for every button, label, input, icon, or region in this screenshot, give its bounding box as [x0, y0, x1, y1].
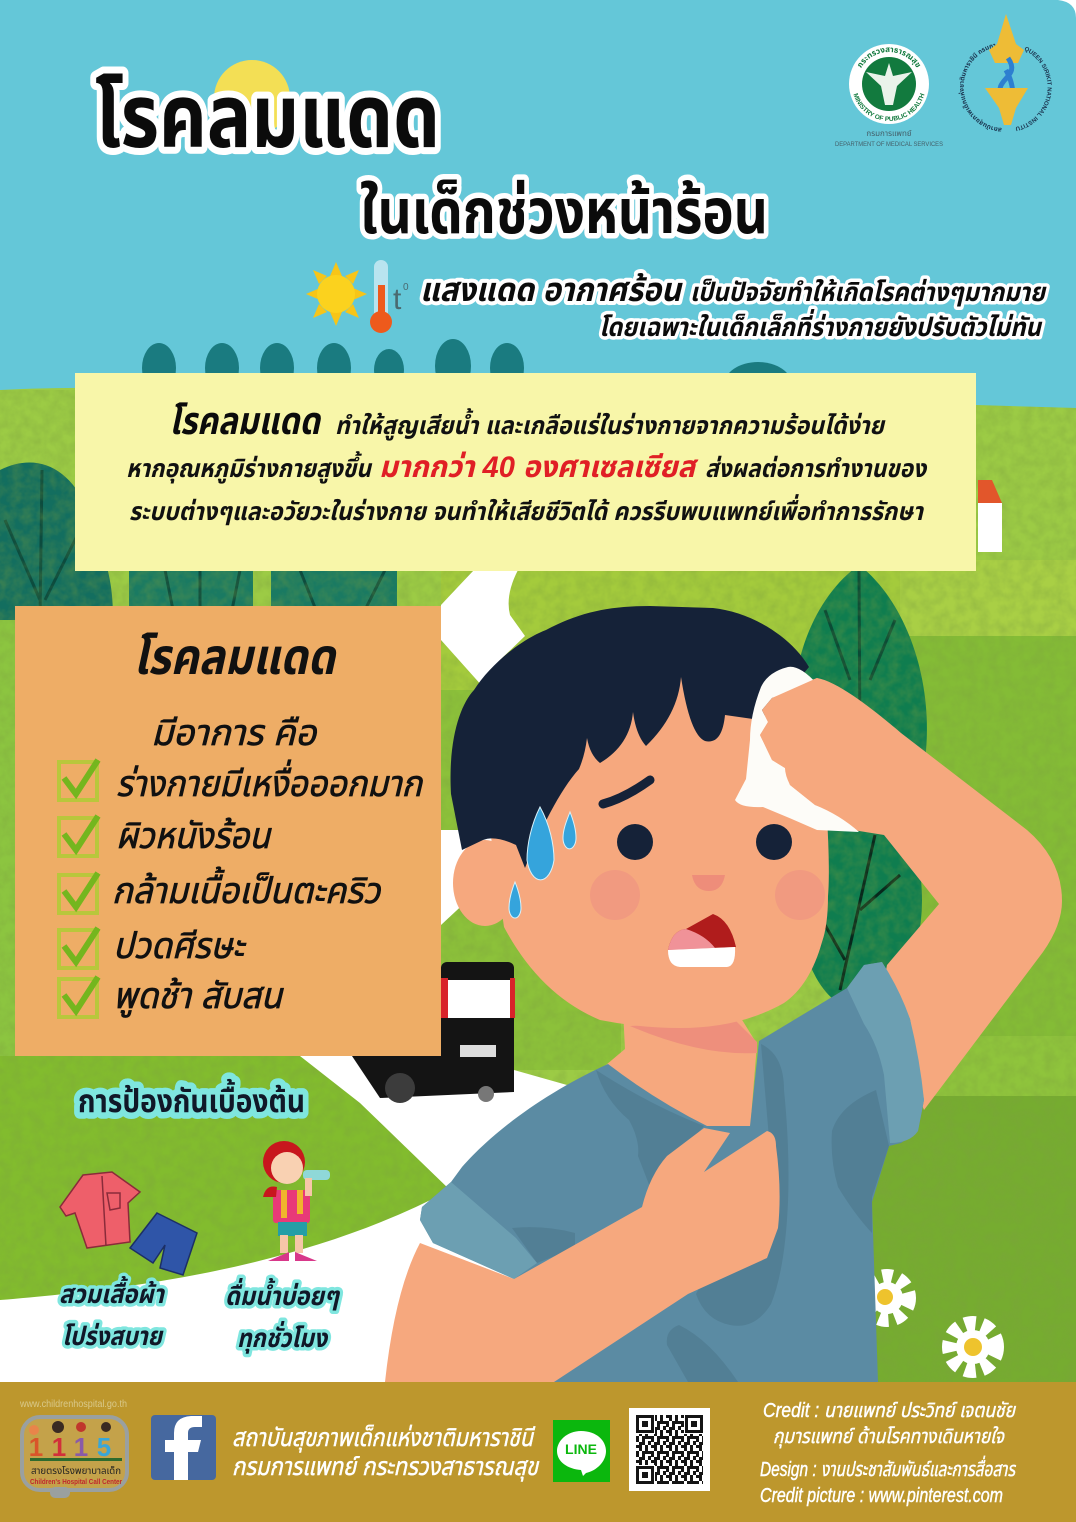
symptom: headache [59, 925, 247, 968]
footer band [0, 1382, 1076, 1522]
panel: symptoms [15, 606, 441, 1056]
credits: Credit picture : www.pinterest.com [760, 1485, 1003, 1507]
logo: Ministry of Public Health: MINISTRY OF PUBLIC HEALTH [854, 93, 924, 121]
credits: กุมารแพทย์ ด้านโรคทางเดินหายใจ [773, 1426, 1005, 1449]
logo: 1115 call center: 1 [52, 1432, 66, 1462]
logo: Ministry of Public Health: กระทรวงสาธารณสุข [858, 47, 920, 68]
eyebrow [603, 780, 650, 804]
icon: thermometer: 0 [403, 282, 409, 293]
description line 3: ระบบต่างๆและอวัยวะในร่างกาย จนทำให้เสียชีวิตได้ ควรรีบพบแพทย์เพื่อทำการรักษา [129, 494, 924, 526]
background: right upper leaf tree [794, 565, 927, 760]
corner cut [1058, 0, 1076, 18]
neck shadow [630, 1021, 757, 1053]
background: white flowers [867, 1278, 995, 1369]
nose [692, 875, 725, 891]
background: distant tree line [142, 339, 792, 408]
logo: 1115 call center: www.childrenhospital.go.th [19, 1399, 127, 1410]
organisation name: กรมการแพทย์ กระทรวงสาธารณสุข [232, 1453, 540, 1482]
logo: Ministry of Public Health: กรมการแพทย์ [866, 129, 912, 138]
hair [451, 606, 809, 868]
logo: 1115 call center: 5 [97, 1432, 111, 1462]
icon: shirt [60, 1172, 140, 1248]
shirt stains [512, 1044, 889, 1382]
title line 2: ในเด็กช่วงหน้าร้อน [360, 178, 768, 247]
mouth [668, 914, 736, 967]
icon: shorts [130, 1213, 197, 1275]
icon: thermometer: t [393, 283, 402, 316]
shirt [420, 962, 924, 1382]
logo: 1115 call center: 1 [74, 1432, 88, 1462]
QR code [629, 1408, 710, 1491]
bus on road [352, 962, 515, 1103]
intro: emphasis: แสงแดด อากาศร้อน [420, 271, 683, 308]
symptom: hot skin: ผิวหนังร้อน [116, 815, 272, 856]
logo: 1115 call center: สายตรงโรงพยาบาลเด็ก [31, 1464, 121, 1477]
icon: LINE: LINE [565, 1441, 597, 1457]
label: drink water hourly: ทุกชั่วโมง [237, 1321, 329, 1354]
label: wear airy clothes [59, 1276, 166, 1351]
logo: Queen Sirikit National Institute of Child Health [958, 14, 1052, 132]
heading: basic prevention: การป้องกันเบื้องต้น [78, 1078, 305, 1119]
shirt sleeves [420, 962, 924, 1279]
icon: thermometer [370, 260, 409, 333]
background: green hills [0, 388, 1076, 1382]
background: sun behind title [214, 60, 290, 136]
background: left trees [0, 462, 397, 620]
hand gripping towel [760, 678, 870, 820]
logo: Ministry of Public Health: DEPARTMENT OF MEDICAL SERVICES [835, 142, 943, 148]
title line 1: โรคลมแดด [95, 67, 440, 166]
symptoms heading: โรคลมแดด [133, 629, 337, 685]
towel [735, 667, 859, 832]
icon: sun [306, 262, 367, 326]
credits [760, 1400, 1017, 1507]
label: drink water hourly: ดื่มน้ำบ่อยๆ [225, 1278, 340, 1311]
description line 2 start: หากอุณหภูมิร่างกายสูงขึ้น [126, 451, 373, 484]
logo: 1115 call center [19, 1399, 127, 1498]
description heading word: โรคลมแดด [169, 401, 322, 443]
logo: 1115 call center: Children's Hospital Call Center [30, 1479, 122, 1486]
background: grass texture [0, 390, 1076, 1382]
background: house [978, 480, 1002, 552]
raised arm [759, 678, 1062, 1110]
icon: LINE [553, 1420, 610, 1482]
symptom: heavy sweating: ร่างกายมีเหงื่อออกมาก [116, 759, 423, 804]
symptom: muscle cramps: กล้ามเนื้อเป็นตะคริว [112, 866, 381, 911]
logo: Ministry of Public Health [835, 44, 943, 148]
label: drink water hourly [225, 1278, 340, 1354]
organisation name [232, 1424, 540, 1482]
description line 1: ทำให้สูญเสียน้ำ และเกลือแร่ในร่างกายจากความร้อนได้ง่าย [335, 408, 886, 441]
sweat drops [509, 807, 576, 918]
highlight: over 40 degrees: มากกว่า 40 องศาเซลเซียส [379, 451, 699, 484]
neck [600, 1010, 757, 1130]
intro: line 1: เป็นปัจจัยทำให้เกิดโรคต่างๆมากมาย [690, 277, 1047, 307]
lower arm and hand [385, 1128, 780, 1382]
boy character [385, 606, 1062, 1382]
symptom: slurred speech, confusion: พูดช้า สับสน [113, 975, 284, 1018]
icon: facebook [151, 1415, 216, 1480]
label: wear airy clothes: สวมเสื้อผ้า [59, 1276, 166, 1309]
description line 2 end: ส่งผลต่อการทำงานของ [705, 455, 928, 483]
background: right lower leaf tree [798, 790, 922, 1010]
cheeks [590, 870, 825, 920]
ear [453, 840, 517, 926]
credits: Credit : นายแพทย์ ประวิทย์ เจตนชัย [763, 1400, 1017, 1422]
eyes [617, 824, 792, 860]
symptoms subheading: มีอาการ คือ [151, 712, 317, 753]
panel: description [75, 373, 976, 571]
symptom: headache: ปวดศีรษะ [113, 925, 247, 966]
background: winding road [0, 570, 620, 1382]
intro: line 2: โดยเฉพาะในเด็กเล็กที่ร่างกายยังปรับตัวไม่ทัน [599, 309, 1043, 342]
face [490, 660, 829, 1028]
icon: girl drinking water [263, 1141, 330, 1261]
logo: 1115 call center: 1 [29, 1432, 43, 1462]
background: sky [0, 0, 1076, 420]
label: wear airy clothes: โปร่งสบาย [62, 1321, 164, 1351]
organisation name: สถาบันสุขภาพเด็กแห่งชาติมหาราชินี [232, 1424, 536, 1453]
